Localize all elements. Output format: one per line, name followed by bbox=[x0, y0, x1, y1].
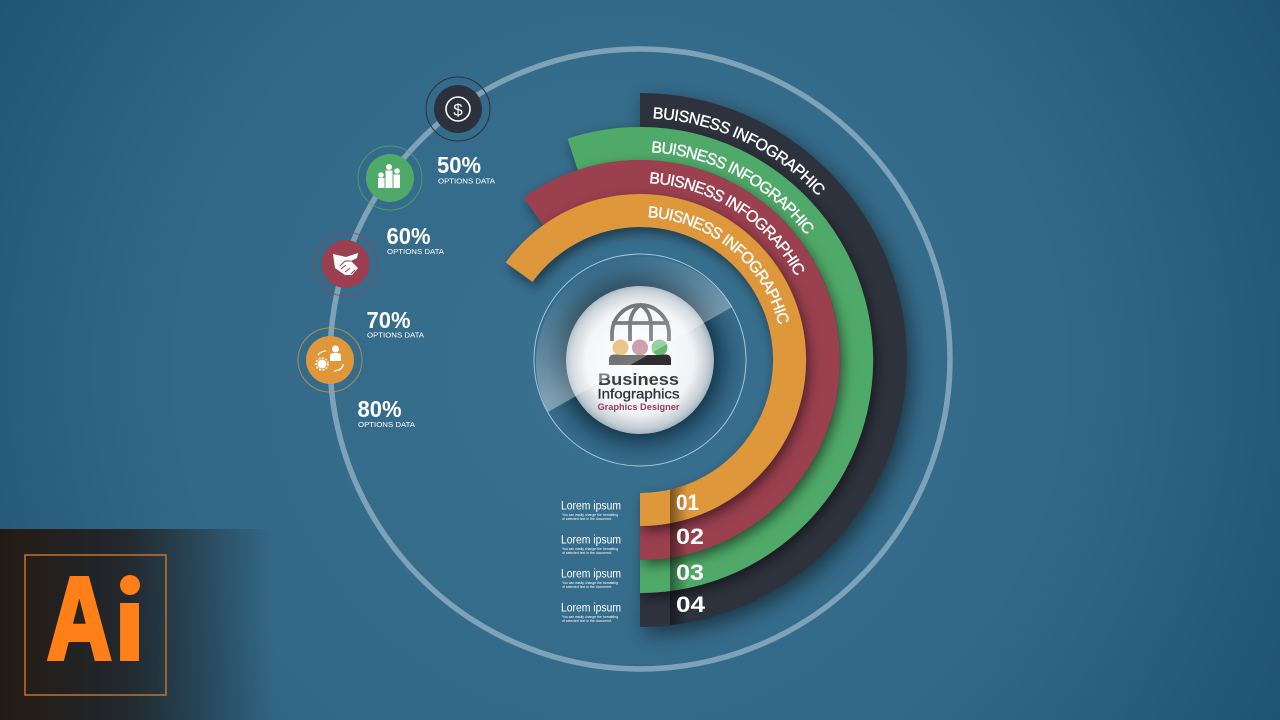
stat: 70%: 70% bbox=[366, 307, 410, 333]
logo globe bbox=[612, 305, 669, 341]
band: red bbox=[523, 158, 850, 572]
center ball bbox=[566, 286, 714, 434]
logo title: Business bbox=[598, 370, 679, 389]
band label: green: BUISNESS INFOGRAPHIC bbox=[652, 141, 814, 234]
band: green bbox=[566, 126, 880, 601]
icon: dollar bbox=[426, 77, 490, 141]
Ai logo: A bbox=[46, 550, 112, 687]
band label: orange: BUISNESS INFOGRAPHIC bbox=[648, 206, 788, 324]
legend item 2: You can easily change the formatting bbox=[562, 547, 618, 551]
band label: black: BUISNESS INFOGRAPHIC bbox=[654, 107, 824, 195]
stat: 60%: OPTIONS DATA bbox=[387, 247, 444, 256]
legend item 4 bbox=[561, 602, 621, 623]
legend item 2: Lorem ipsum bbox=[561, 534, 621, 546]
band: orange bbox=[506, 192, 816, 538]
icon: gears and person bbox=[298, 328, 362, 392]
band label: red: BUISNESS INFOGRAPHIC bbox=[650, 172, 804, 275]
legend item 1 bbox=[561, 500, 621, 521]
band numbers: 04 bbox=[676, 592, 706, 617]
legend item 1: You can easily change the formatting bbox=[562, 513, 618, 517]
legend item 1: Lorem ipsum bbox=[561, 500, 621, 512]
stat: 80%: 80% bbox=[358, 396, 402, 422]
icon: people podium bbox=[358, 146, 422, 210]
legend item 4: You can easily change the formatting bbox=[562, 615, 618, 619]
Ai logo: i bbox=[112, 551, 147, 688]
logo people bbox=[609, 340, 671, 365]
legend item 1: of selected text in the document. bbox=[562, 517, 612, 521]
stat: 80%: OPTIONS DATA bbox=[358, 420, 415, 429]
band numbers bbox=[676, 490, 706, 617]
fold shadow at band ends bbox=[670, 485, 686, 626]
icon: dollar: $ bbox=[453, 100, 463, 120]
band numbers: 02 bbox=[676, 524, 704, 549]
logo tagline: Graphics Designer bbox=[598, 402, 680, 413]
stat: 60% bbox=[386, 223, 444, 256]
band numbers: 01 bbox=[676, 490, 699, 515]
legend item 3: You can easily change the formatting bbox=[562, 581, 618, 585]
stat: 70%: OPTIONS DATA bbox=[367, 330, 424, 340]
legend item 4: of selected text in the document. bbox=[562, 619, 612, 623]
icon: handshake bbox=[314, 232, 378, 296]
stat: 50% bbox=[437, 152, 495, 186]
legend item 3: Lorem ipsum bbox=[561, 568, 621, 580]
stat: 50%: OPTIONS DATA bbox=[438, 176, 495, 186]
logo subtitle: Infographics bbox=[598, 386, 680, 402]
stat: 80% bbox=[358, 396, 415, 429]
legend item 3 bbox=[561, 568, 621, 589]
stat: 70% bbox=[366, 307, 424, 340]
band numbers: 03 bbox=[676, 560, 704, 585]
legend item 4: Lorem ipsum bbox=[561, 602, 621, 614]
center glass disc bbox=[534, 254, 746, 466]
legend item 2: of selected text in the document. bbox=[562, 551, 612, 555]
logo bbox=[598, 305, 680, 413]
Ai badge background bbox=[0, 529, 275, 720]
glass sheen overlay bbox=[536, 257, 732, 412]
band: black bbox=[634, 90, 924, 644]
legend item 3: of selected text in the document. bbox=[562, 585, 612, 589]
stat: 50%: 50% bbox=[437, 152, 481, 178]
stat: 60%: 60% bbox=[386, 223, 430, 249]
legend item 2 bbox=[561, 534, 621, 555]
Ai logo bbox=[25, 550, 166, 695]
outer ring bbox=[330, 49, 950, 669]
